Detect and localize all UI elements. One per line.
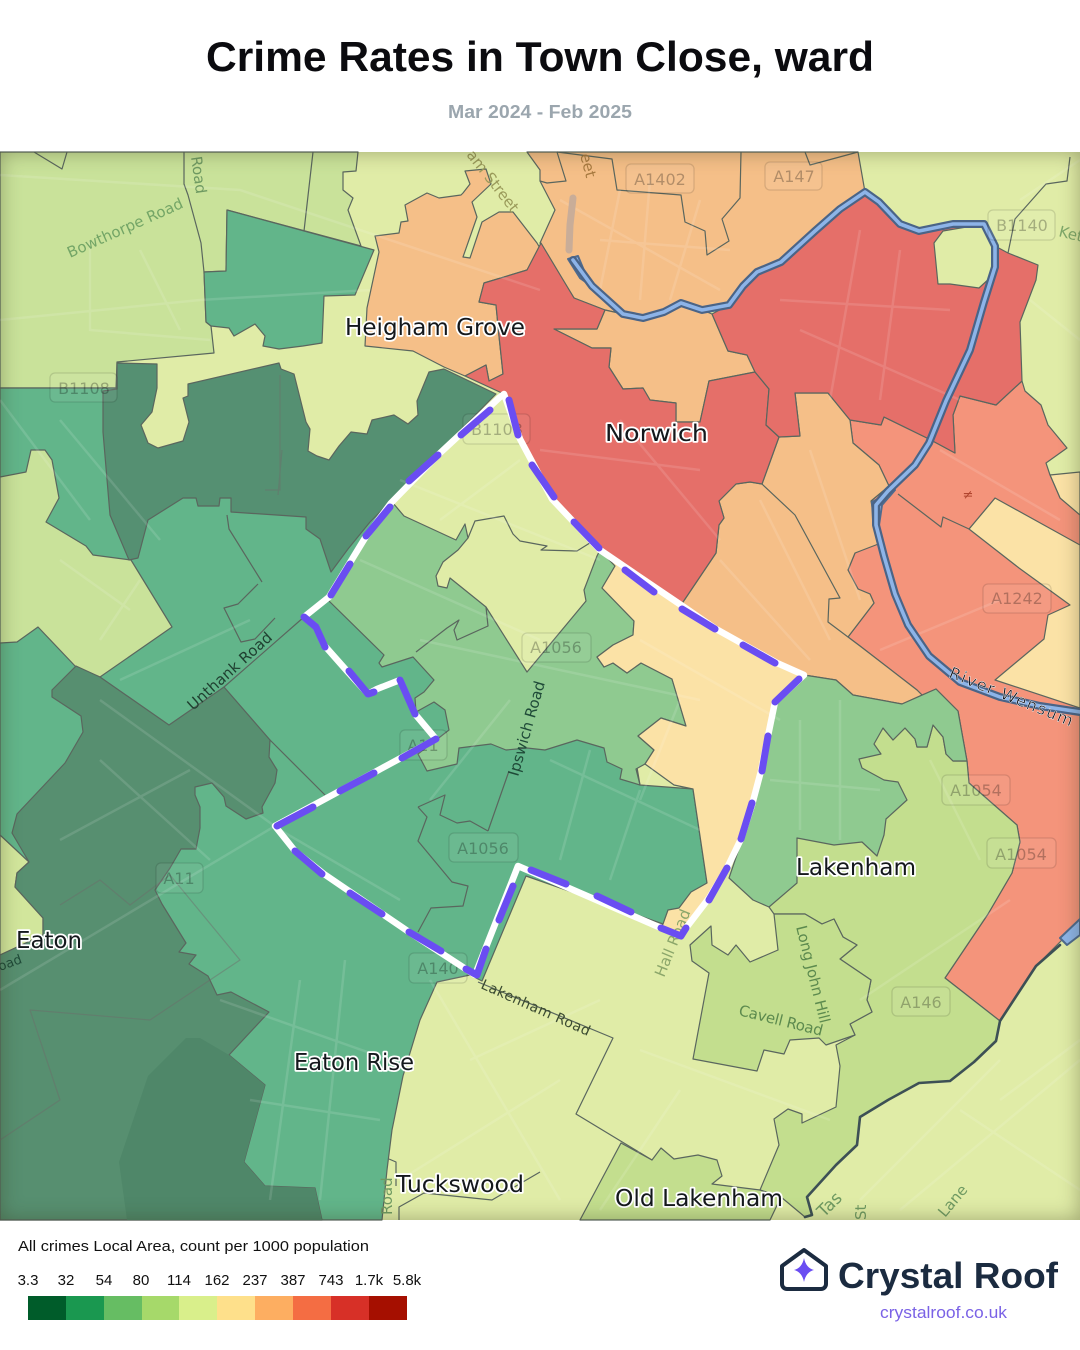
legend scale values bbox=[18, 1272, 422, 1289]
road labels: Hall Road bbox=[651, 907, 694, 979]
road shields: A1242 bbox=[991, 589, 1043, 608]
legend scale values: 237 bbox=[242, 1272, 268, 1289]
railway station marker: ≠ bbox=[963, 488, 973, 503]
road labels: Unthank Road bbox=[184, 628, 276, 714]
road shields: B1108 bbox=[471, 420, 523, 439]
subtitle: date range: Mar 2024 - Feb 2025 bbox=[448, 101, 632, 122]
logo: Crystal Roof bbox=[782, 1250, 1059, 1322]
place names: Lakenham bbox=[796, 855, 916, 881]
place names: Eaton Rise bbox=[294, 1050, 414, 1076]
brand name: Crystal Roof bbox=[838, 1255, 1059, 1296]
road labels: Lakenham Road bbox=[478, 977, 593, 1040]
road shields: A1054 bbox=[995, 845, 1047, 864]
river Wensum bbox=[568, 192, 1080, 1217]
road network bbox=[0, 160, 1080, 1210]
place names: Heigham Grove bbox=[345, 315, 525, 341]
road shields: B1140 bbox=[996, 216, 1048, 235]
road labels: Road bbox=[378, 1177, 396, 1215]
road shields: A147 bbox=[773, 167, 815, 186]
legend colour bar bbox=[28, 1296, 407, 1320]
legend scale values: 743 bbox=[318, 1272, 344, 1289]
road labels: Road bbox=[187, 155, 210, 195]
legend scale values: 5.8k bbox=[393, 1272, 422, 1289]
road shields: A140 bbox=[417, 959, 459, 978]
road shields: A11 bbox=[407, 736, 439, 755]
legend scale values: 32 bbox=[58, 1272, 74, 1289]
road shields: A1402 bbox=[634, 170, 686, 189]
legend scale values: 3.3 bbox=[18, 1272, 38, 1289]
place names: Norwich bbox=[605, 421, 708, 447]
road labels: St bbox=[852, 1204, 870, 1220]
road shields: A11 bbox=[163, 869, 195, 888]
place names: Eaton bbox=[16, 928, 82, 954]
legend scale values: 1.7k bbox=[355, 1272, 384, 1289]
road labels: Cavell Road bbox=[737, 1001, 825, 1040]
road shields bbox=[50, 162, 1056, 1016]
legend scale values: 162 bbox=[204, 1272, 230, 1289]
road labels: Long John Hill bbox=[792, 924, 834, 1025]
road shields: A1056 bbox=[530, 638, 582, 657]
legend title: All crimes Local Area, count per 1000 population bbox=[18, 1238, 369, 1255]
road labels: Tas bbox=[813, 1188, 847, 1222]
place names: Old Lakenham bbox=[615, 1186, 783, 1212]
legend scale values: 54 bbox=[96, 1272, 112, 1289]
road labels: am Street bbox=[463, 146, 523, 216]
title: Crime Rates in Town Close, ward bbox=[206, 33, 874, 80]
legend bbox=[18, 1238, 422, 1320]
road labels bbox=[0, 146, 1080, 1222]
road labels: River Wensum bbox=[947, 663, 1076, 730]
brand url: crystalroof.co.uk bbox=[880, 1304, 1008, 1322]
road shields: A146 bbox=[900, 993, 942, 1012]
icon: house with star bbox=[782, 1250, 826, 1289]
place names: Tuckswood bbox=[395, 1172, 524, 1198]
legend scale values: 387 bbox=[280, 1272, 306, 1289]
legend scale values: 80 bbox=[133, 1272, 149, 1289]
road shields: A1056 bbox=[457, 839, 509, 858]
road labels: eet bbox=[576, 151, 600, 180]
legend scale values: 114 bbox=[167, 1272, 191, 1289]
road labels: Bowthorpe Road bbox=[64, 194, 186, 262]
ward boundary: Town Close bbox=[275, 394, 804, 975]
road shields: A1054 bbox=[950, 781, 1002, 800]
road shields: B1108 bbox=[58, 379, 110, 398]
road labels: Ipswich Road bbox=[505, 679, 549, 778]
choropleth map bbox=[0, 152, 1080, 1220]
road labels: Lane bbox=[934, 1181, 971, 1221]
place names bbox=[16, 315, 916, 1212]
